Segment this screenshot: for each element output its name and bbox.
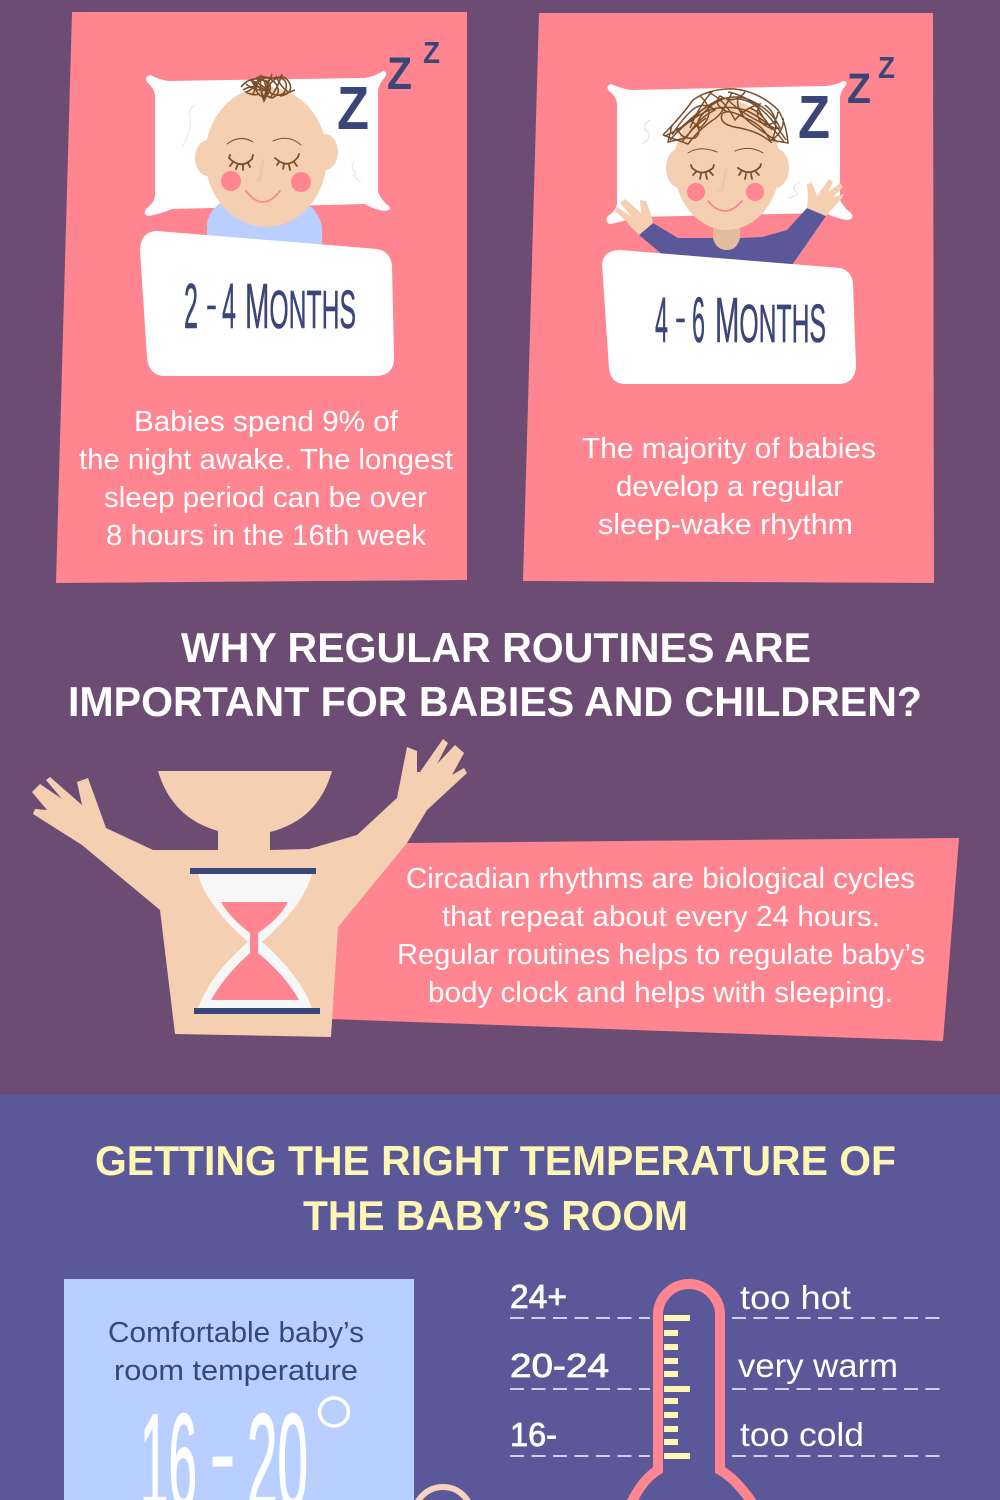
description [582,433,876,541]
thermometer ticks [664,1315,690,1459]
heading: temperature: THE BABY’S ROOM [303,1192,688,1239]
scale descriptions: too hot [740,1279,851,1316]
scale descriptions [738,1279,898,1453]
face details [688,148,763,211]
hourglass sand [211,902,299,1000]
callout text: body clock and helps with sleeping. [428,977,893,1009]
panel: comfortable temperature [64,1279,414,1500]
heading: routines: IMPORTANT FOR BABIES AND CHILDREN? [68,678,922,725]
callout text: Regular routines helps to regulate baby’s [397,939,925,971]
description: develop a regular [616,471,843,503]
age label: - [206,283,217,327]
age label: 4 [655,284,668,356]
chart: thermometer scale [510,1278,947,1500]
baby head [195,87,338,227]
callout background [330,838,959,1041]
degree symbol [320,1398,348,1426]
snore letters: Z [798,83,830,151]
description: sleep-wake rhythm [598,509,853,541]
description: 8 hours in the 16th week [106,520,427,552]
icon: peach ring [414,1487,472,1500]
scale values: 24+ [510,1278,567,1315]
hourglass top bar [190,868,316,874]
panel: 2-4 months [56,12,467,583]
age label: - [675,296,686,340]
panel text: room temperature [114,1355,358,1387]
hourglass bottom bar [194,1008,320,1014]
description [79,406,453,552]
scale values: 20-24 [510,1347,609,1384]
heading: routines [68,624,922,725]
snore letters: Z [387,48,412,99]
age label [655,284,826,356]
thermometer outline [628,1284,757,1500]
callout text: Circadian rhythms are biological cycles [406,863,915,895]
description: Babies spend 9% of [134,406,399,438]
age label: MONTHS [245,270,356,342]
dashed guide lines [510,1318,947,1456]
snore letters [798,50,895,151]
baby body [207,202,322,250]
description: The majority of babies [582,433,876,465]
illustration: sleeping infant [602,50,895,384]
hair [241,74,295,101]
panel background [56,12,467,583]
pillow creases [642,120,800,198]
illustration: figure with hourglass body [32,739,467,1037]
figure torso and arms [32,739,467,1037]
scale values [510,1278,609,1453]
age label: MONTHS [715,284,826,356]
snore letters: Z [423,35,440,70]
age label: 6 [692,284,705,356]
neck [713,225,740,250]
age label: 4 [222,270,236,342]
callout text [397,863,925,1009]
hair [663,89,788,144]
pillow creases [182,105,361,182]
snore letters: Z [337,74,369,142]
pyjama body and arms [639,208,826,265]
scale values: 16- [510,1416,557,1453]
hourglass [190,868,320,1014]
heading: temperature [95,1137,896,1239]
scale descriptions: too cold [740,1416,864,1453]
snore letters: Z [847,65,871,113]
blanket [602,250,856,384]
description: the night awake. The longest [79,444,453,476]
panel text: Comfortable baby’s [108,1317,364,1349]
cheeks [687,183,764,201]
heading: temperature: GETTING THE RIGHT TEMPERATURE OF [95,1137,896,1184]
background: lower indigo section [0,1095,1000,1500]
description: sleep period can be over [104,482,427,514]
callout text: that repeat about every 24 hours. [442,901,880,933]
heading: routines: WHY REGULAR ROUTINES ARE [181,624,811,671]
callout: circadian rhythms [330,838,959,1041]
hourglass glass [198,874,312,1008]
background: upper purple section [0,0,1000,1095]
scale descriptions: very warm [738,1347,898,1384]
hands [615,179,844,235]
panel background [64,1279,414,1500]
snore letters: Z [878,50,895,85]
cheeks [221,171,311,192]
panel text [108,1317,364,1387]
age label [184,270,356,342]
panel background [523,13,934,583]
snore letters [337,35,440,142]
blanket [140,231,394,376]
head [666,100,789,230]
panel: 4-6 months [523,13,934,583]
face details [227,138,301,202]
age label: 2 [184,270,198,342]
illustration: sleeping baby [140,35,440,376]
pillow [145,71,390,216]
pillow [606,81,852,224]
